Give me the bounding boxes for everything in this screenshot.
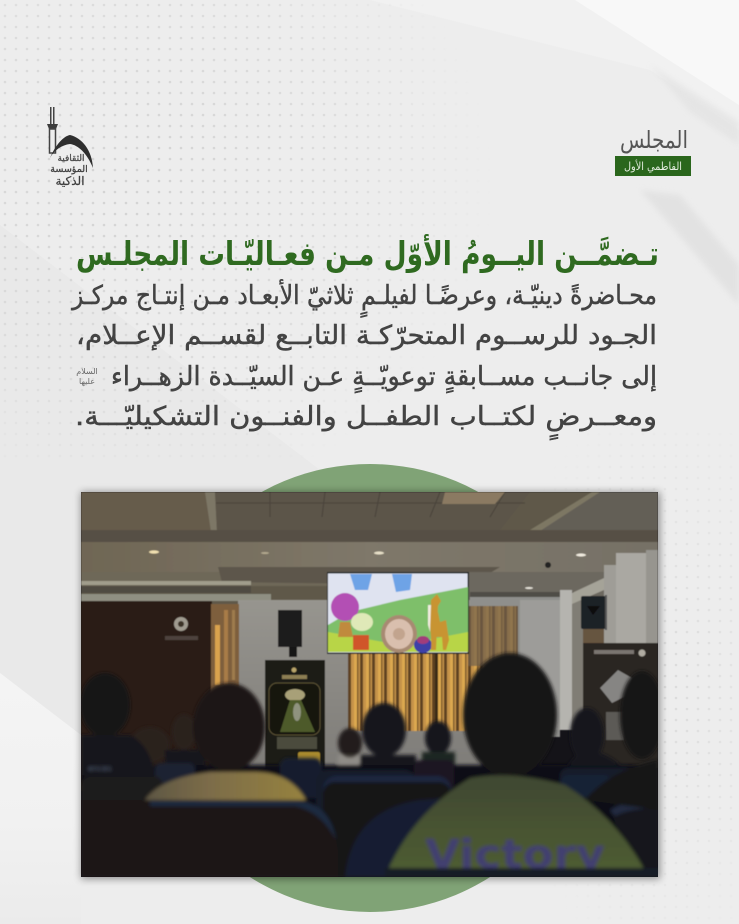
body text [70, 278, 657, 441]
line 4: ومعــرضٍ لكتــاب الطفــل والفنــون التشكيليّـــة. [75, 402, 657, 441]
line 1: محـاضرةً دينيّـة، وعرضًـا لفيلـمٍ ثلاثيّ الأبعـاد مـن إنتـاج مركـز [70, 278, 657, 319]
photo shadow [81, 492, 660, 879]
seats navy [81, 775, 658, 877]
tag text: الفاطمي الأول [624, 159, 682, 173]
left person [80, 673, 155, 775]
majlis label: المجلس [620, 126, 688, 154]
line 2: الجـود للرســوم المتحرّكـة التابــع لقســم الإعــلام، [76, 321, 657, 351]
roll-up banner [264, 660, 326, 768]
walls [238, 550, 658, 780]
back row people [132, 700, 619, 769]
left seat top [82, 775, 162, 800]
honorific [76, 367, 98, 386]
logo: minaret and dome emblem: الثقافية [57, 154, 85, 164]
photo: audience watching animated film [80, 492, 665, 878]
left dark banner [81, 600, 240, 765]
honorific: عليها [79, 377, 95, 386]
honorific: السلام [76, 367, 98, 376]
curtain under screen [348, 606, 518, 733]
left person: ences [88, 764, 111, 773]
center person [145, 683, 306, 800]
right speaker [581, 595, 607, 630]
screen showing cartoon [327, 572, 469, 654]
logo: minaret and dome emblem: المؤسسة [50, 164, 88, 175]
heading badge: majlis [615, 126, 691, 176]
right banner [583, 643, 658, 768]
left speaker [278, 610, 302, 657]
green tag [615, 156, 691, 176]
audience [80, 653, 665, 878]
logo: minaret and dome emblem: الذكية [55, 174, 85, 188]
right person [588, 670, 658, 810]
front right person: Victory [425, 832, 605, 878]
front right person [385, 653, 665, 878]
line 3: إلى جانــب مســابقةٍ توعويّــةٍ عـن السيّــدة الزهــراء [111, 362, 657, 394]
green circle behind photo [146, 464, 594, 912]
ceiling [81, 492, 658, 612]
seats mid row [81, 755, 636, 828]
logo: minaret and dome emblem [47, 107, 93, 188]
